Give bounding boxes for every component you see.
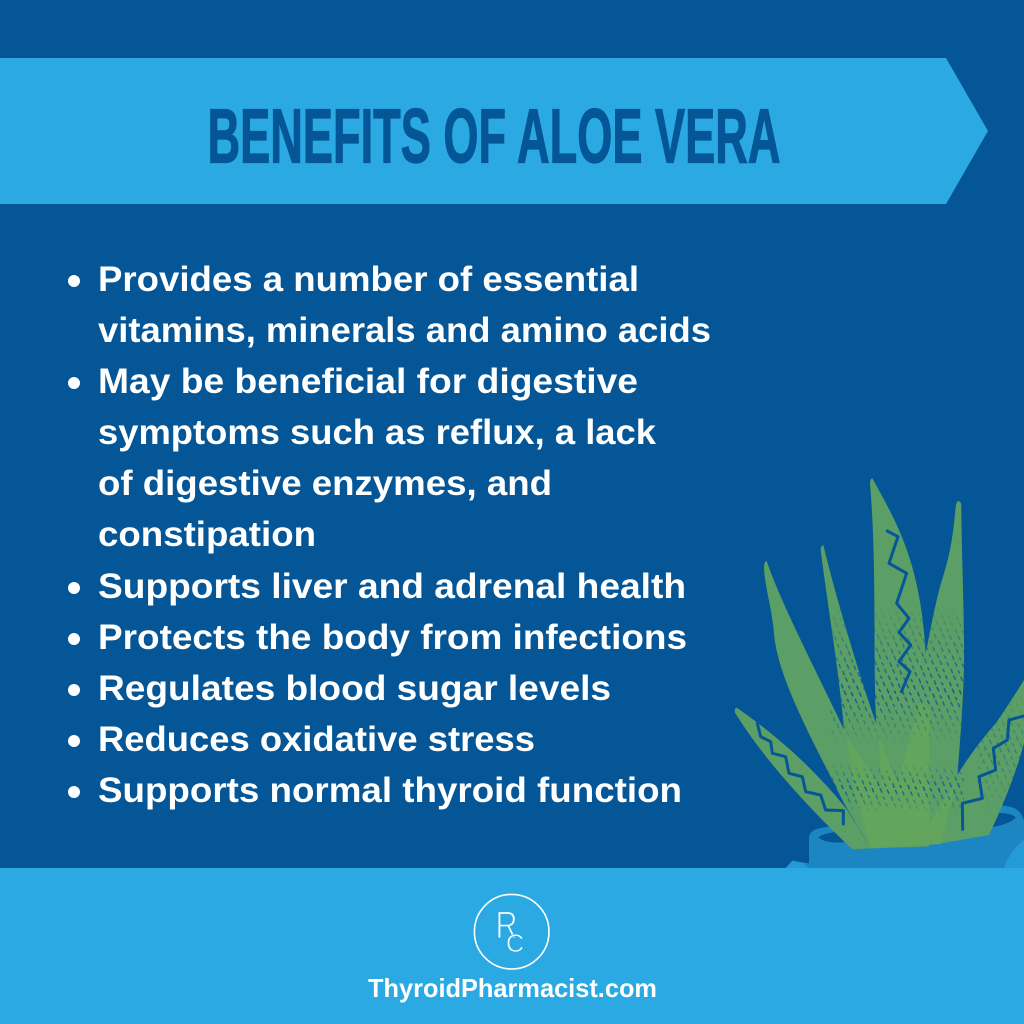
- leaf texture speckles: [826, 610, 1024, 812]
- benefit: digestive: of digestive enzymes, and: [98, 464, 552, 503]
- benefit: blood sugar: Regulates blood sugar levels: [98, 669, 611, 708]
- benefit: vitamins: [68, 260, 711, 350]
- footer band: [0, 868, 1024, 1024]
- logo: RC monogram: C: [506, 930, 524, 958]
- benefit: vitamins: vitamins, minerals and amino acids: [98, 311, 711, 350]
- website: ThyroidPharmacist.com: [368, 973, 657, 1003]
- benefit: digestive: constipation: [98, 515, 316, 554]
- benefits list: [68, 260, 711, 810]
- logo: RC monogram: [474, 894, 549, 969]
- benefit: oxidative stress: Reduces oxidative stress: [98, 720, 535, 759]
- benefit: digestive: [68, 362, 657, 554]
- pot: [784, 806, 1024, 870]
- benefit: liver: Supports liver and adrenal health: [98, 567, 686, 606]
- benefit: thyroid: Supports normal thyroid function: [98, 771, 682, 810]
- lighter leaf overlaps: [847, 700, 957, 848]
- title banner: [0, 58, 988, 204]
- benefit: vitamins: Provides a number of essential: [98, 260, 639, 299]
- benefit: digestive: symptoms such as reflux, a lack: [98, 413, 657, 452]
- aloe vera plant in pot: [735, 478, 1024, 870]
- benefit: infections: Protects the body from infections: [98, 618, 687, 657]
- leaf zigzag markings: [757, 531, 1024, 829]
- benefit: digestive: May be beneficial for digestive: [98, 362, 638, 401]
- logo: RC monogram: R: [496, 904, 518, 947]
- leaves: [735, 478, 1024, 849]
